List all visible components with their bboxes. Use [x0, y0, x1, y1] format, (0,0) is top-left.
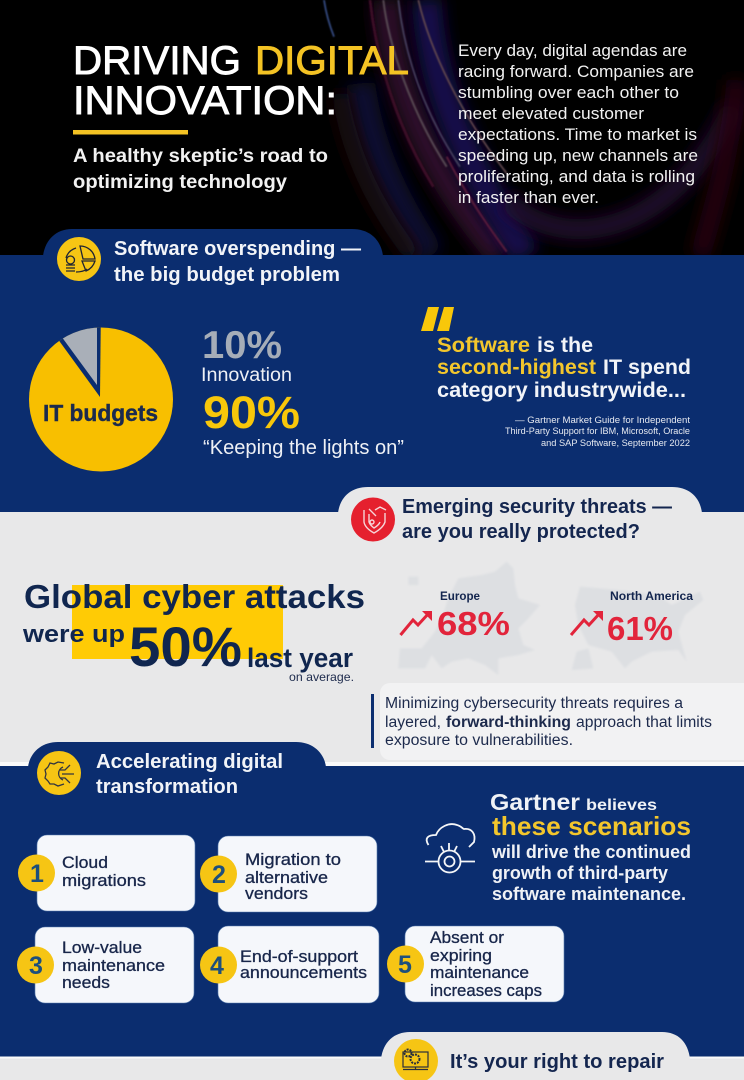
text block: minimizing cybersecurity threats — [371, 683, 744, 760]
heading: emerging security threats: are you really protected? — [402, 521, 640, 543]
card 3: low-value maintenance needs — [17, 927, 194, 1003]
panel: accelerating digital transformation — [0, 742, 744, 1057]
callout: Gartner believes: these scenarios — [492, 811, 691, 841]
intro paragraph: speeding up, new channels are — [458, 147, 698, 165]
card 5: absent or expiring maintenance increases caps: maintenance — [430, 964, 529, 982]
card 1: cloud migrations: 1 — [30, 860, 44, 888]
quote: category industrywide... — [437, 378, 686, 402]
card 4: end-of-support announcements: 4 — [210, 952, 224, 980]
callout: global cyber attacks: Global cyber attacks — [24, 578, 365, 615]
card 1: cloud migrations: migrations — [62, 872, 146, 890]
heading: emerging security threats — [402, 496, 672, 543]
subtitle: optimizing technology — [73, 172, 287, 193]
card 4: end-of-support announcements — [200, 926, 379, 1003]
intro paragraph: stumbling over each other to — [458, 84, 679, 102]
card 4: end-of-support announcements: announcements — [240, 964, 367, 982]
callout: Gartner believes: believes — [586, 797, 657, 814]
card 5: absent or expiring maintenance increases caps: Absent or — [430, 929, 505, 947]
map: North America: 61% — [607, 610, 673, 647]
card 5: absent or expiring maintenance increases caps — [387, 926, 564, 1002]
card 2: migration to alternative vendors: vendors — [245, 885, 308, 903]
callout: Gartner believes: software maintenance. — [492, 884, 686, 904]
card 1: cloud migrations — [18, 835, 195, 911]
callout: global cyber attacks: were up — [22, 621, 125, 648]
heading: software overspending: the big budget problem — [114, 264, 340, 286]
quote — [437, 333, 691, 402]
stat: 90% keeping the lights on — [203, 387, 404, 459]
citation: Third-Party Support for IBM, Microsoft, Oracle — [505, 426, 690, 437]
icon: digital gear — [37, 751, 81, 795]
intro paragraph: expectations. Time to market is — [458, 126, 697, 144]
subtitle: A healthy skeptic’s road to — [73, 146, 328, 167]
card 5: absent or expiring maintenance increases caps: increases caps — [430, 982, 542, 1000]
panel: dark header — [0, 0, 744, 256]
callout: Gartner believes: Gartner — [490, 789, 580, 815]
card 2: migration to alternative vendors: alternative — [245, 869, 328, 887]
stat: 10% innovation — [201, 324, 292, 386]
stat: 90% keeping the lights on: 90% — [203, 387, 300, 438]
text block: minimizing cybersecurity threats: Minimizing cybersecurity threats requires a — [385, 695, 683, 712]
stat: 90% keeping the lights on: “Keeping the lights on” — [203, 437, 404, 459]
callout: Gartner believes — [490, 789, 691, 904]
callout: global cyber attacks: last year — [247, 643, 353, 673]
stat: 10% innovation: Innovation — [201, 365, 292, 386]
text block: minimizing cybersecurity threats: forward-thinking — [446, 714, 571, 731]
heading: accelerating digital transformation — [96, 751, 283, 798]
panel: emerging security threats — [0, 487, 744, 767]
quote: IT spend — [603, 355, 691, 379]
card 2: migration to alternative vendors: 2 — [212, 861, 226, 889]
callout: Gartner believes: will drive the continued — [491, 842, 691, 862]
callout: global cyber attacks: 50% — [129, 615, 242, 678]
title: DRIVING — [73, 39, 241, 83]
card 5: absent or expiring maintenance increases caps: expiring — [430, 947, 492, 965]
citation: — Gartner Market Guide for Independent — [515, 415, 690, 426]
subtitle — [73, 146, 328, 193]
stat: 10% innovation: 10% — [202, 324, 282, 367]
title: DIGITAL — [255, 39, 409, 83]
map: Europe: 68% — [437, 605, 510, 642]
quote: Software — [437, 333, 530, 357]
map: Europe: Europe — [440, 589, 480, 603]
pie chart: IT budgets: IT budgets — [43, 400, 158, 426]
citation: and SAP Software, September 2022 — [541, 438, 690, 449]
card 2: migration to alternative vendors — [200, 836, 377, 912]
heading: accelerating digital transformation: transformation — [96, 776, 238, 798]
icon: cloud and target — [425, 824, 475, 872]
heading: emerging security threats: Emerging security threats — — [402, 496, 672, 518]
heading: software overspending: Software overspending — — [114, 238, 361, 260]
heading: accelerating digital transformation: Accelerating digital — [96, 751, 283, 773]
heading: right to repair: It’s your right to repair — [450, 1051, 664, 1073]
card 3: low-value maintenance needs: needs — [62, 974, 110, 992]
icon: quotation mark — [421, 307, 454, 331]
panel: right to repair — [0, 1032, 744, 1080]
intro paragraph: proliferating, and data is rolling — [458, 168, 695, 186]
title — [73, 39, 409, 123]
map: North America: North America — [610, 589, 693, 603]
card 3: low-value maintenance needs: 3 — [29, 952, 43, 980]
card 4: end-of-support announcements: End-of-support — [240, 948, 358, 966]
title underline — [73, 130, 188, 134]
pie chart: IT budgets — [29, 328, 173, 472]
callout: global cyber attacks: on average. — [289, 670, 354, 684]
map: Europe — [398, 562, 540, 675]
quote: is the — [537, 333, 593, 357]
icon: gears on laptop — [394, 1039, 438, 1080]
card 2: migration to alternative vendors: Migration to — [245, 851, 341, 869]
intro paragraph — [458, 42, 698, 207]
title: INNOVATION: — [73, 79, 337, 123]
quote: second-highest — [437, 355, 596, 379]
callout: Gartner believes: growth of third-party — [492, 863, 668, 883]
callout: global cyber attacks — [22, 578, 365, 684]
intro paragraph: racing forward. Companies are — [458, 63, 694, 81]
icon: broken shield — [351, 498, 395, 542]
text block: minimizing cybersecurity threats: approach that limits — [576, 714, 712, 731]
map: North America — [571, 587, 703, 670]
card 1: cloud migrations: Cloud — [62, 854, 108, 872]
citation — [505, 415, 690, 449]
card 3: low-value maintenance needs: maintenance — [62, 957, 165, 975]
intro paragraph: in faster than ever. — [458, 189, 599, 207]
panel: software overspending — [0, 229, 744, 513]
intro paragraph: meet elevated customer — [458, 105, 645, 123]
icon: budget pie and coins — [57, 237, 101, 281]
text block: minimizing cybersecurity threats: exposure to vulnerabilities. — [385, 732, 573, 749]
card 5: absent or expiring maintenance increases caps: 5 — [398, 951, 412, 979]
text block: minimizing cybersecurity threats: layered, — [385, 714, 441, 731]
heading: software overspending — [114, 238, 361, 286]
intro paragraph: Every day, digital agendas are — [458, 42, 687, 60]
card 3: low-value maintenance needs: Low-value — [62, 939, 142, 957]
